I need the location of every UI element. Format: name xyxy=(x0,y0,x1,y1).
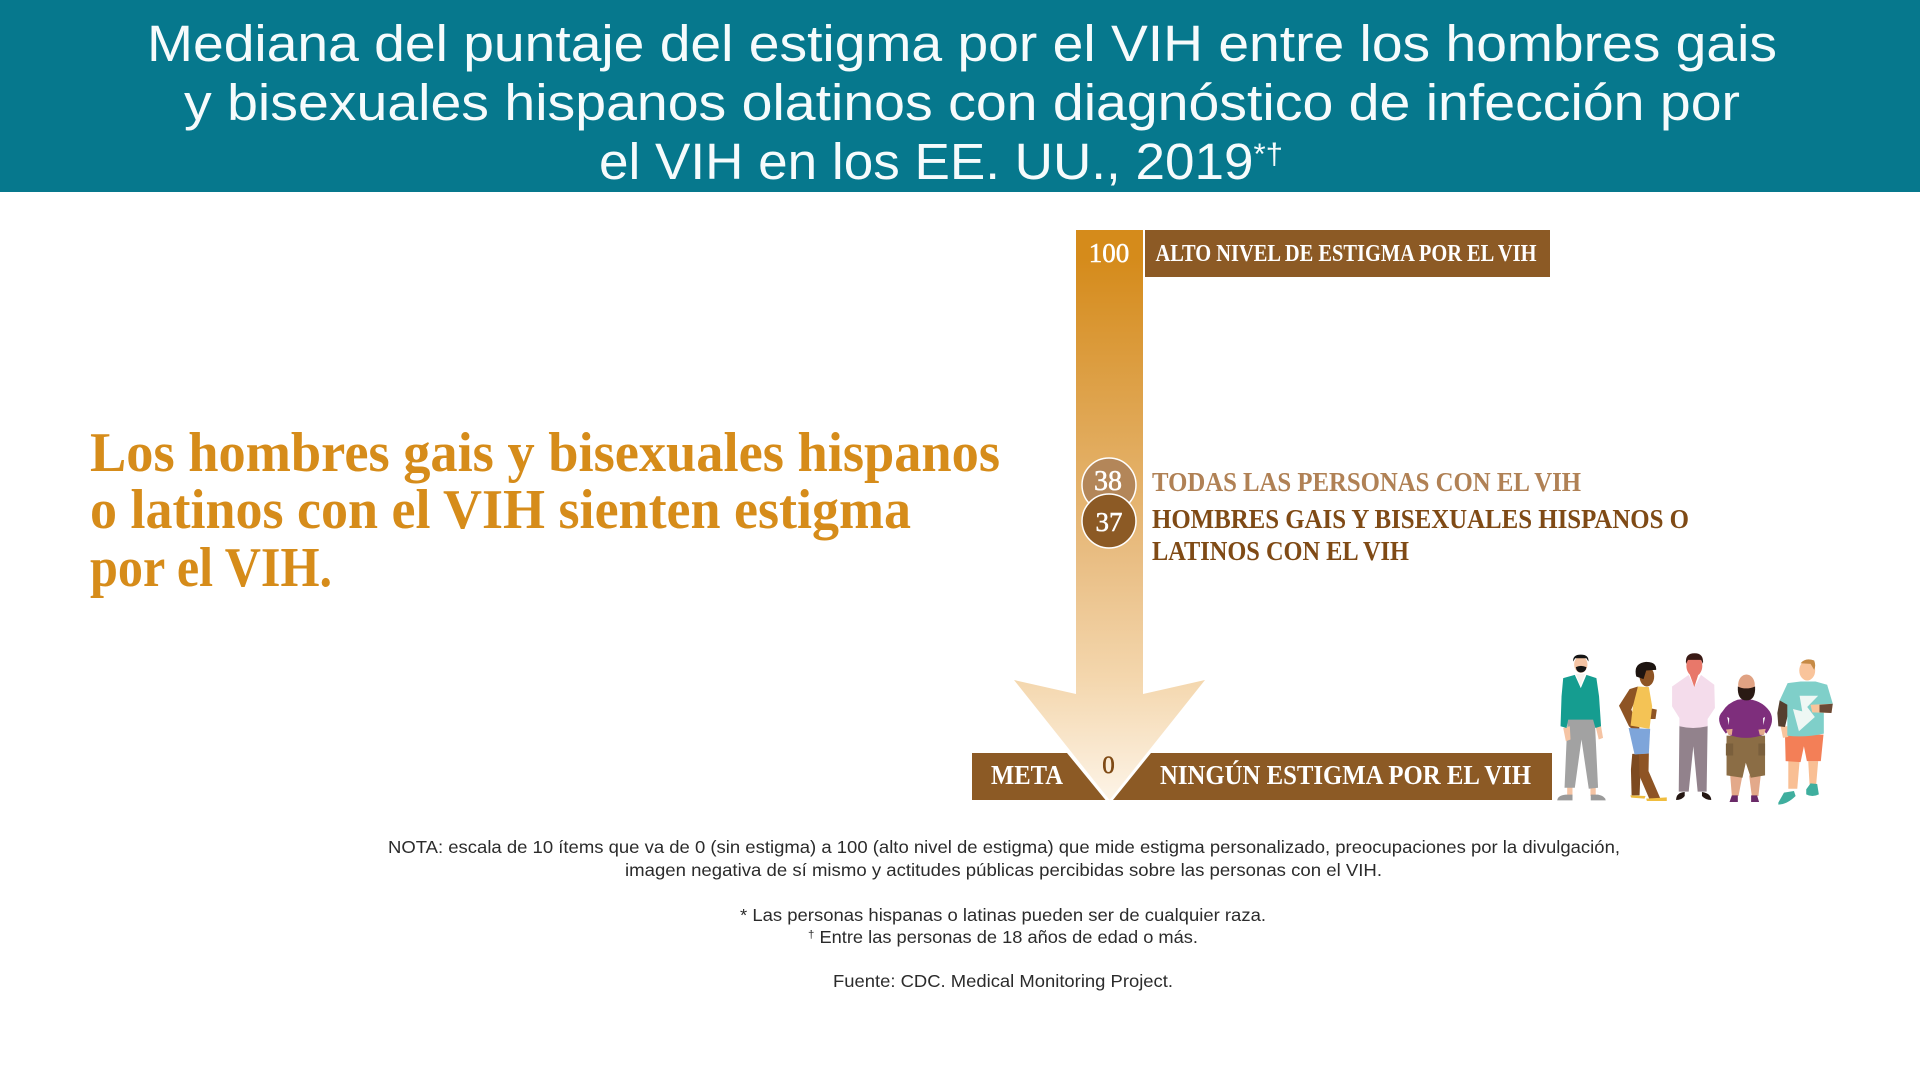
title: Mediana del puntaje del estigma por el VIH entre los hombres gais xyxy=(147,15,1777,72)
scale arrow xyxy=(1014,230,1205,800)
label: todas las personas: TODAS LAS PERSONAS CON EL VIH xyxy=(1152,467,1581,497)
marker: 37 gay and bisexual men: 37 xyxy=(1096,507,1122,537)
footnotes: * Las personas hispanas o latinas pueden ser de cualquier raza. xyxy=(740,905,1266,925)
label bar: ningún estigma xyxy=(1113,753,1552,800)
man in teal sweater xyxy=(1557,655,1606,800)
label: hombres gais: LATINOS CON EL VIH xyxy=(1152,536,1409,566)
footnotes: Fuente: CDC. Medical Monitoring Project. xyxy=(833,971,1173,991)
label bar: meta xyxy=(972,753,1106,800)
label bar: meta: META xyxy=(991,760,1063,790)
marker: 38 all people: 38 xyxy=(1094,466,1122,497)
main statement: o latinos con el VIH sienten estigma xyxy=(90,479,911,541)
footnotes: † xyxy=(808,929,814,941)
marker: 38 all people xyxy=(1082,458,1136,512)
scale value 0: 0 xyxy=(1102,752,1115,779)
main statement: por el VIH. xyxy=(90,537,332,599)
label: hombres gais xyxy=(1152,504,1689,566)
marker: 37 gay and bisexual men xyxy=(1082,494,1136,548)
man in yellow tank top xyxy=(1619,662,1667,801)
title: el VIH en los EE. UU., 2019 xyxy=(599,133,1228,190)
title xyxy=(147,15,1777,190)
man in purple shirt xyxy=(1719,674,1772,802)
footnotes: NOTA: escala de 10 ítems que va de 0 (sin estigma) a 100 (alto nivel de estigma) que mide estigma personalizado, preocupaciones por la divulgación, xyxy=(388,837,1620,857)
title: *† xyxy=(1254,138,1283,171)
label: hombres gais: HOMBRES GAIS Y BISEXUALES HISPANOS O xyxy=(1152,504,1689,534)
main statement xyxy=(90,422,1000,599)
scale value 100: 100 xyxy=(1089,238,1129,268)
illustration: group of five men xyxy=(1557,653,1833,805)
label bar: alto nivel xyxy=(1145,230,1550,277)
main statement: Los hombres gais y bisexuales hispanos xyxy=(90,422,1000,484)
man in pink shirt xyxy=(1672,653,1715,800)
footnotes xyxy=(388,837,1620,991)
title: y bisexuales hispanos olatinos con diagnóstico de infección por xyxy=(184,74,1740,131)
label bar: ningún estigma: NINGÚN ESTIGMA POR EL VIH xyxy=(1160,760,1531,790)
label bar: alto nivel: ALTO NIVEL DE ESTIGMA POR EL VIH xyxy=(1156,241,1537,267)
footnotes: imagen negativa de sí mismo y actitudes públicas percibidas sobre las personas con el VIH. xyxy=(625,860,1382,880)
header banner xyxy=(0,0,1920,192)
man in aqua t-shirt xyxy=(1777,659,1833,805)
footnotes: Entre las personas de 18 años de edad o más. xyxy=(814,927,1198,947)
